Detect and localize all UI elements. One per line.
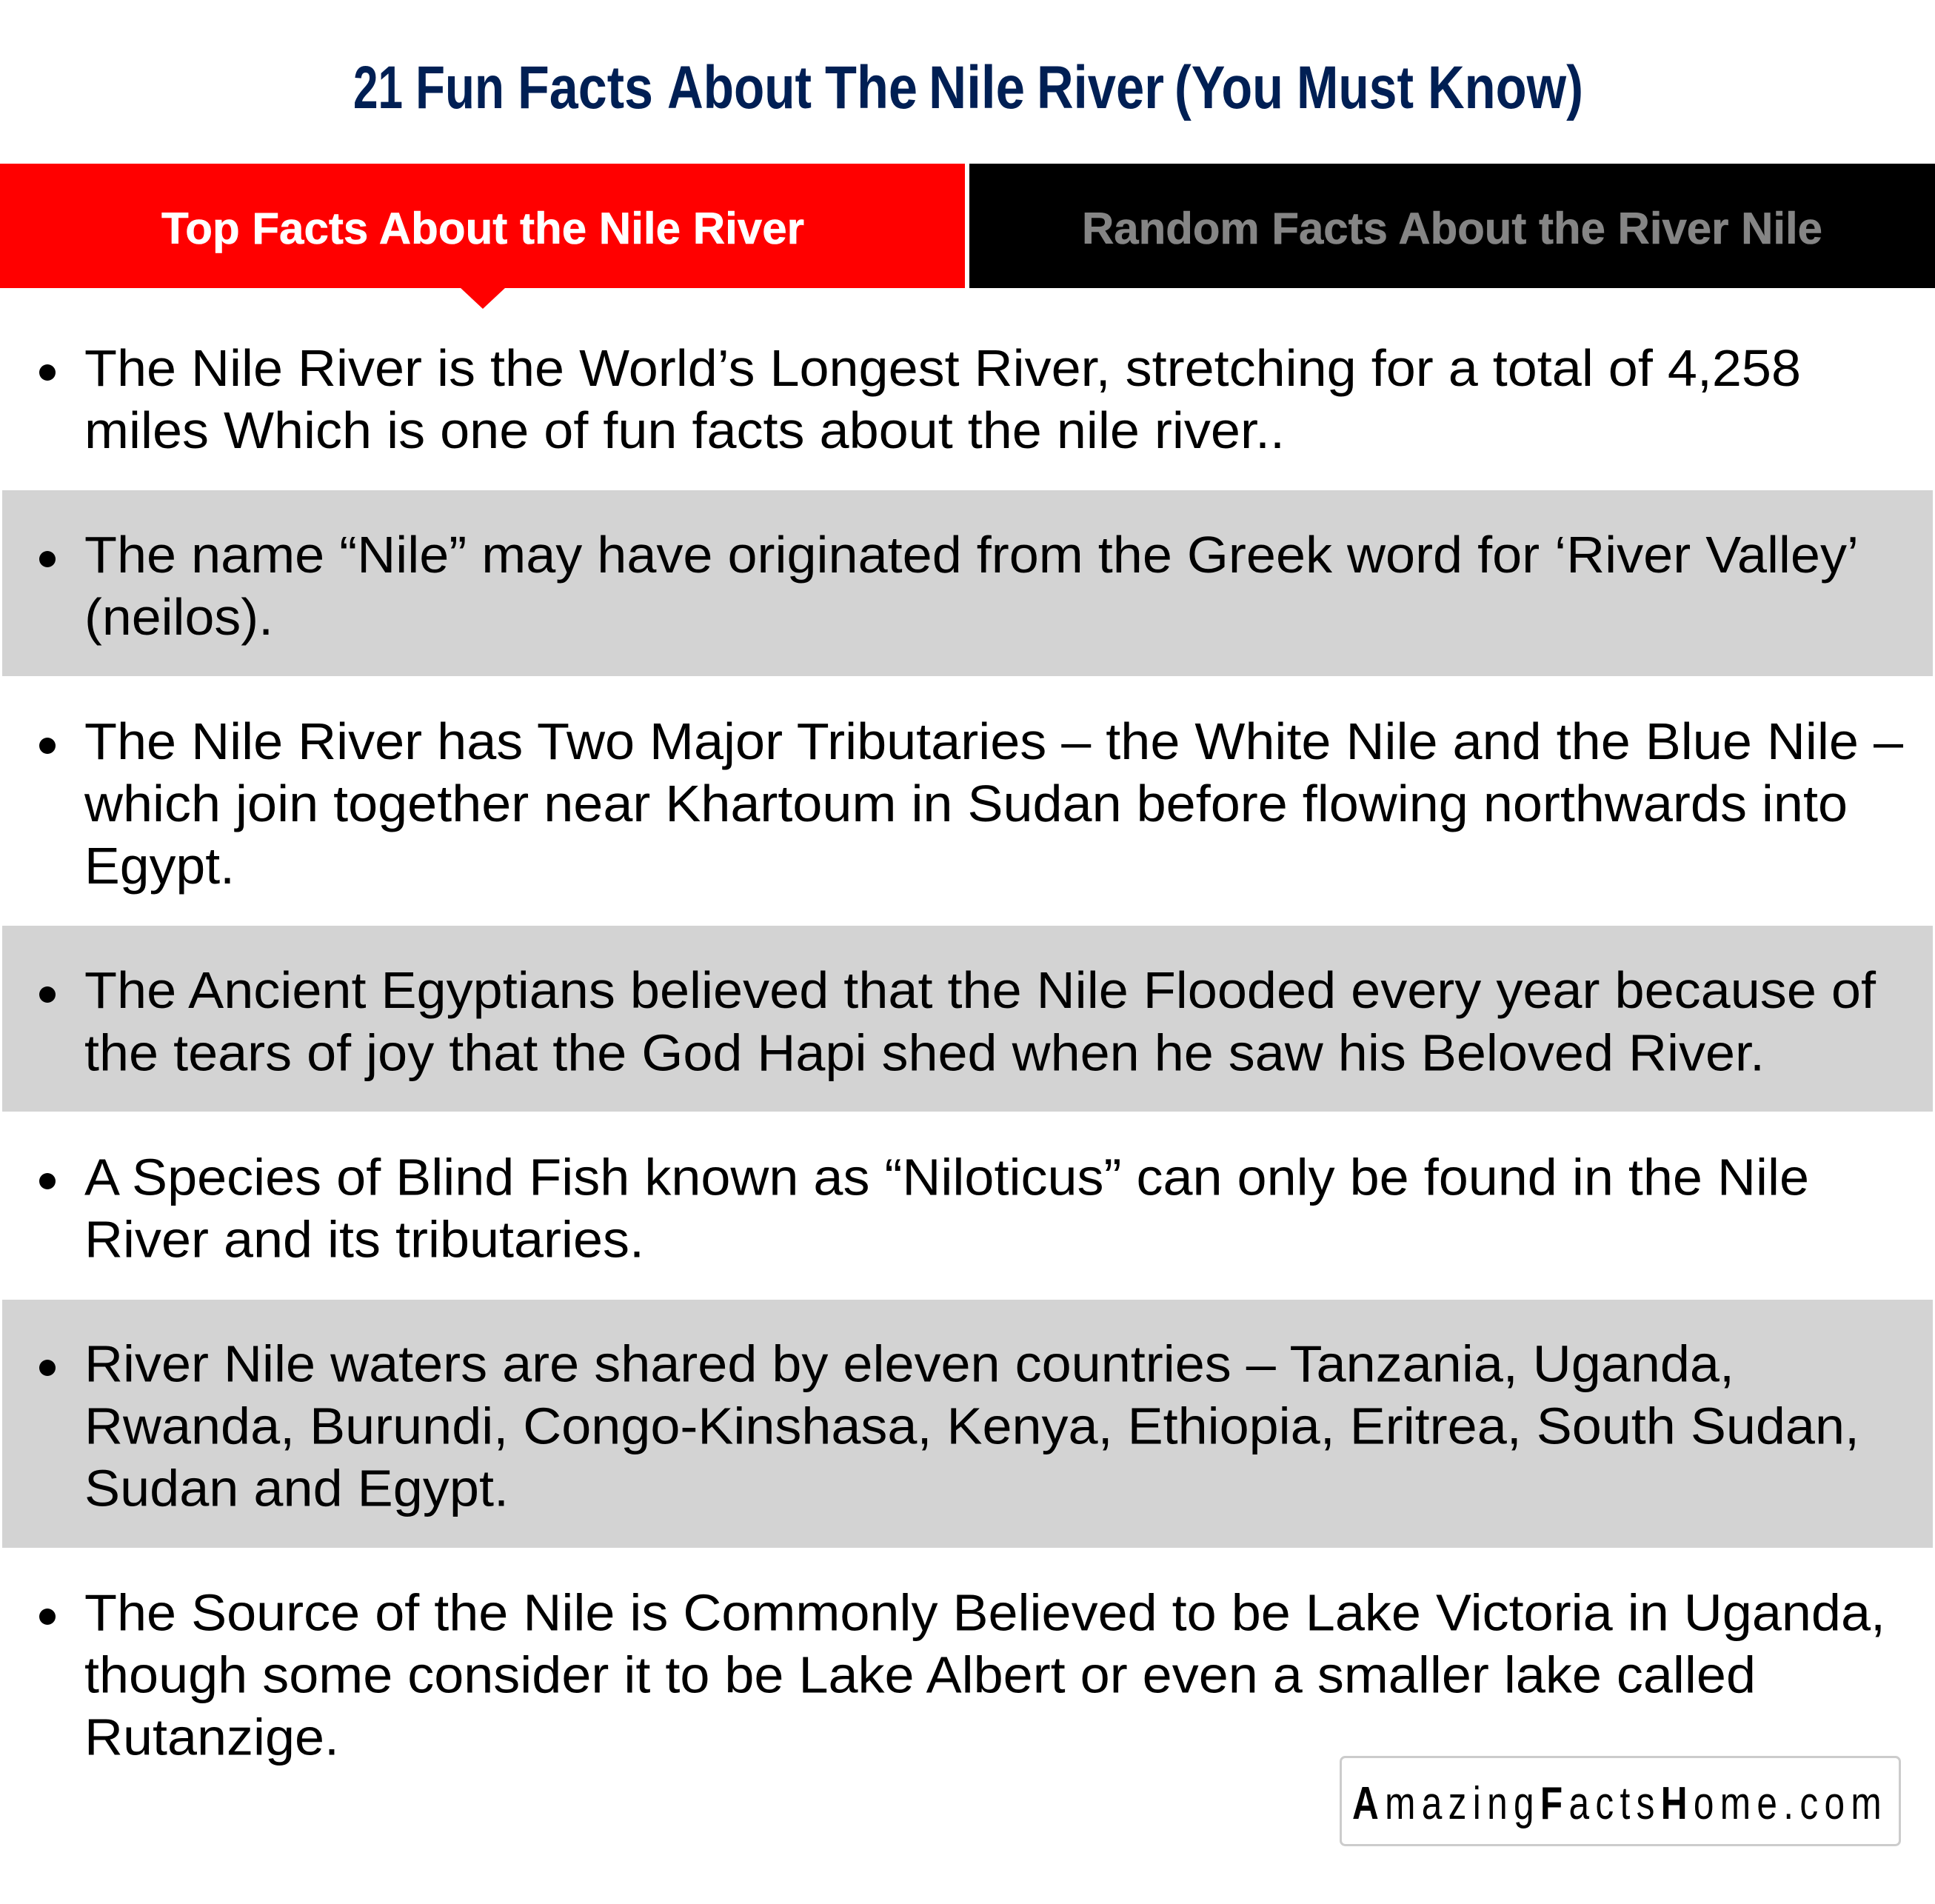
fact 7: though some consider it to be Lake Albert or even a smaller lake called <box>84 1646 1756 1703</box>
title: Know) <box>1428 54 1583 121</box>
fact 7: The Source of the Nile is Commonly Believed to be Lake Victoria in Uganda, <box>84 1583 1885 1641</box>
fact 1 <box>39 339 1801 459</box>
tab: random facts (inactive): Random Facts About the River Nile <box>1082 204 1822 253</box>
title: 21 <box>353 54 403 121</box>
fact 3: Egypt. <box>84 837 235 895</box>
fact 4 row: the tears of joy that the God Hapi shed when he saw his Beloved River. <box>84 1023 1765 1081</box>
title: Fun <box>415 54 504 121</box>
title: River <box>1037 54 1164 121</box>
fact 3: which join together near Khartoum in Sudan before flowing northwards into <box>84 775 1848 832</box>
fact 5: River and its tributaries. <box>84 1210 644 1268</box>
fact 3: The Nile River has Two Major Tributaries – the White Nile and the Blue Nile – <box>84 712 1903 770</box>
title: The <box>825 54 918 121</box>
tab: random facts (inactive) <box>969 164 1935 288</box>
title: Facts <box>518 54 653 121</box>
fact 4 row: The Ancient Egyptians believed that the Nile Flooded every year because of <box>84 961 1876 1019</box>
fact 4 row <box>2 926 1933 1112</box>
title: About <box>667 54 812 121</box>
title: Must <box>1297 54 1414 121</box>
fact 7 <box>39 1583 1885 1766</box>
fact 1: miles Which is one of fun facts about the nile river.. <box>84 401 1285 459</box>
fact 2 row: The name “Nile” may have originated from the Greek word for ‘River Valley’ <box>84 526 1859 584</box>
fact 5: A Species of Blind Fish known as “Niloticus” can only be found in the Nile <box>84 1148 1809 1206</box>
watermark box: AmazingFactsHome.com <box>1352 1777 1888 1828</box>
fact 6 row: Rwanda, Burundi, Congo-Kinshasa, Kenya, Ethiopia, Eritrea, South Sudan, <box>84 1397 1859 1454</box>
title: (You <box>1174 54 1283 121</box>
fact 6 row: River Nile waters are shared by eleven countries – Tanzania, Uganda, <box>84 1335 1734 1392</box>
fact 5 <box>39 1148 1809 1268</box>
fact 3 <box>39 712 1903 895</box>
title <box>353 54 1583 121</box>
fact 1: The Nile River is the World’s Longest River, stretching for a total of 4,258 <box>84 339 1801 397</box>
fact 6 row: Sudan and Egypt. <box>84 1459 509 1517</box>
title: Nile <box>929 54 1025 121</box>
fact 6 row <box>2 1300 1933 1548</box>
tab: top facts (active): Top Facts About the Nile River <box>161 204 804 253</box>
fact 2 row: (neilos). <box>84 588 273 646</box>
fact 2 row <box>2 490 1933 676</box>
tab: top facts (active) <box>0 164 965 309</box>
fact 7: Rutanzige. <box>84 1708 339 1766</box>
watermark box <box>1340 1757 1900 1845</box>
